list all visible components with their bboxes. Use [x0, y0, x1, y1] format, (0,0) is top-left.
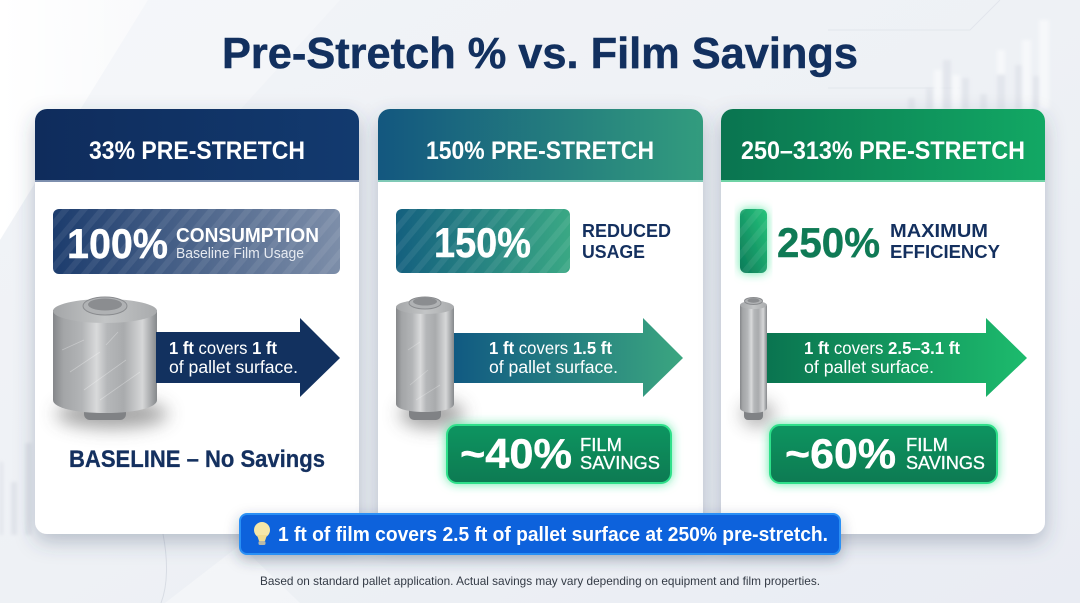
savings badge: 60%: ~60% — [785, 430, 896, 477]
film roll: wide — [53, 297, 168, 428]
panel header: 250-313%: 250–313% PRE-STRETCH — [741, 137, 1025, 165]
arrow: 1 ft covers 1.5 ft — [454, 318, 683, 397]
arrow: 1 ft covers 1 ft: of pallet surface. — [169, 357, 298, 377]
usage label: reduced usage: USAGE — [582, 241, 645, 262]
usage label: maximum efficiency — [890, 220, 1001, 262]
usage label: reduced usage — [582, 220, 671, 262]
usage label: reduced usage: REDUCED — [582, 220, 671, 241]
savings badge: 40%: ~40% — [460, 430, 572, 477]
arrow: 1 ft covers 1 ft — [156, 318, 340, 397]
savings badge: 60%: FILM — [906, 435, 948, 455]
arrow: 1 ft covers 1 ft: 1 ft covers 1 ft — [169, 338, 277, 358]
savings badge: 60% — [770, 425, 997, 483]
film roll: medium — [396, 297, 464, 428]
panel header: 150%: 150% PRE-STRETCH — [426, 137, 654, 165]
usage badge: 100% consumption: 100% — [67, 220, 168, 267]
panel: 33% pre-stretch — [35, 109, 359, 534]
arrow: 1 ft covers 2.5-3.1 ft: 1 ft covers 2.5–3.1 ft — [804, 338, 960, 358]
panel header: 33%: 33% PRE-STRETCH — [89, 137, 305, 165]
usage badge: 150%: 150% — [434, 219, 531, 266]
usage badge: 150% — [396, 209, 570, 273]
usage badge: 100% consumption: Baseline Film Usage — [176, 246, 304, 262]
panel header: 33% — [35, 109, 359, 182]
usage badge: 100% consumption — [53, 209, 340, 274]
savings badge: 60%: SAVINGS — [906, 453, 985, 473]
icon: light bulb — [254, 522, 270, 545]
savings badge: 40%: SAVINGS — [580, 453, 660, 473]
panel header: 250-313% — [721, 109, 1045, 182]
savings badge: 40% — [447, 425, 671, 483]
film roll: narrow — [740, 298, 774, 426]
usage value: 250%: 250% — [777, 219, 880, 266]
panel: 250-313% pre-stretch — [721, 109, 1045, 534]
footnote: Based on standard pallet application. Actual savings may vary depending on equipment and film properties. — [260, 574, 820, 588]
usage label: maximum efficiency: EFFICIENCY — [890, 241, 1001, 262]
callout — [240, 514, 840, 554]
arrow: 1 ft covers 2.5-3.1 ft: of pallet surface. — [804, 357, 934, 377]
usage badge: 100% consumption: CONSUMPTION — [176, 225, 319, 247]
panel: 150% pre-stretch — [378, 109, 703, 534]
arrow: 1 ft covers 1.5 ft: 1 ft covers 1.5 ft — [489, 338, 612, 358]
usage badge: narrow bar — [740, 209, 767, 273]
savings badge: 40%: FILM — [580, 435, 622, 455]
usage label: maximum efficiency: MAXIMUM — [890, 220, 988, 241]
callout: 1 ft of film covers 2.5 ft of pallet surface at 250% pre-stretch. — [278, 524, 828, 546]
arrow: 1 ft covers 1.5 ft: of pallet surface. — [489, 357, 618, 377]
title: Pre-Stretch % vs. Film Savings — [222, 29, 858, 78]
baseline label: BASELINE – No Savings — [69, 446, 325, 473]
arrow: 1 ft covers 2.5-3.1 ft — [767, 318, 1027, 397]
panel header: 150% — [378, 109, 703, 182]
